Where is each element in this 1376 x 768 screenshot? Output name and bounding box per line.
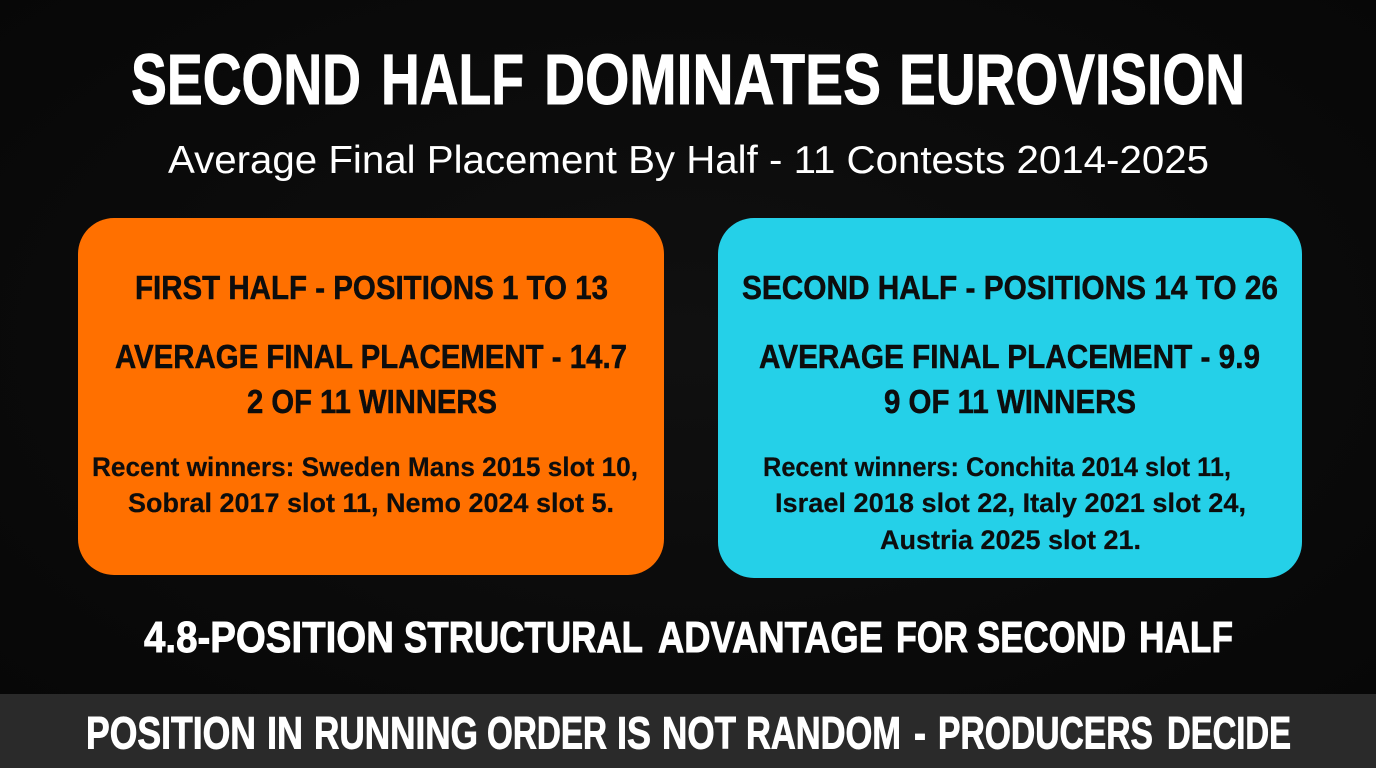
footer band <box>0 694 1376 768</box>
stat: second half winners: 9 OF 11 WINNERS <box>884 383 1136 420</box>
footer text: RUNNING <box>314 708 478 758</box>
title: DOMINATES <box>544 41 881 120</box>
callout: structural advantage: STRUCTURAL <box>404 613 643 662</box>
subtitle: Average Final Placement By Half - 11 Contests 2014-2025 <box>168 139 1209 182</box>
panel: second half <box>718 218 1302 578</box>
footer banner <box>0 694 1376 768</box>
footer text: ORDER <box>487 708 607 758</box>
stat: first half average placement: AVERAGE FINAL PLACEMENT - 14.7 <box>115 338 627 375</box>
heading: first half positions: FIRST HALF - POSITIONS 1 TO 13 <box>135 269 608 306</box>
title: HALF <box>381 41 524 120</box>
callout: structural advantage: SECOND <box>977 613 1126 662</box>
title: SECOND <box>131 41 361 120</box>
title: EUROVISION <box>899 41 1245 120</box>
footer text: RANDOM <box>746 708 901 758</box>
callout: structural advantage: FOR <box>896 613 968 662</box>
text block: first half recent winners <box>92 452 638 518</box>
title <box>131 41 1245 120</box>
heading: second half positions: SECOND HALF - POSITIONS 14 TO 26 <box>742 269 1278 306</box>
callout: structural advantage <box>144 613 1233 662</box>
callout: structural advantage: HALF <box>1139 613 1233 662</box>
text block: second half recent winners: Israel 2018 slot 22, Italy 2021 slot 24, <box>775 488 1246 518</box>
panel: first half <box>78 218 664 575</box>
footer text: POSITION <box>86 708 256 758</box>
callout: structural advantage: ADVANTAGE <box>658 613 883 662</box>
text block: first half recent winners: Sobral 2017 slot 11, Nemo 2024 slot 5. <box>128 488 614 518</box>
footer text: IS <box>617 708 651 758</box>
text block: first half recent winners: Recent winners: Sweden Mans 2015 slot 10, <box>92 452 638 482</box>
panel background: orange card <box>78 218 664 575</box>
footer text: DECIDE <box>1167 708 1291 758</box>
footer text: NOT <box>662 708 736 758</box>
stat: second half average placement: AVERAGE FINAL PLACEMENT - 9.9 <box>759 338 1260 375</box>
callout: structural advantage: 4.8-POSITION <box>144 613 394 662</box>
footer text: - <box>914 708 926 758</box>
text block: second half recent winners: Recent winners: Conchita 2014 slot 11, <box>763 452 1231 482</box>
footer text <box>86 708 1291 758</box>
stat: first half winners: 2 OF 11 WINNERS <box>247 383 497 420</box>
text block: second half recent winners: Austria 2025 slot 21. <box>880 525 1141 555</box>
panel background: cyan card <box>718 218 1302 578</box>
text block: second half recent winners <box>763 452 1246 555</box>
footer text: IN <box>267 708 303 758</box>
footer text: PRODUCERS <box>938 708 1153 758</box>
